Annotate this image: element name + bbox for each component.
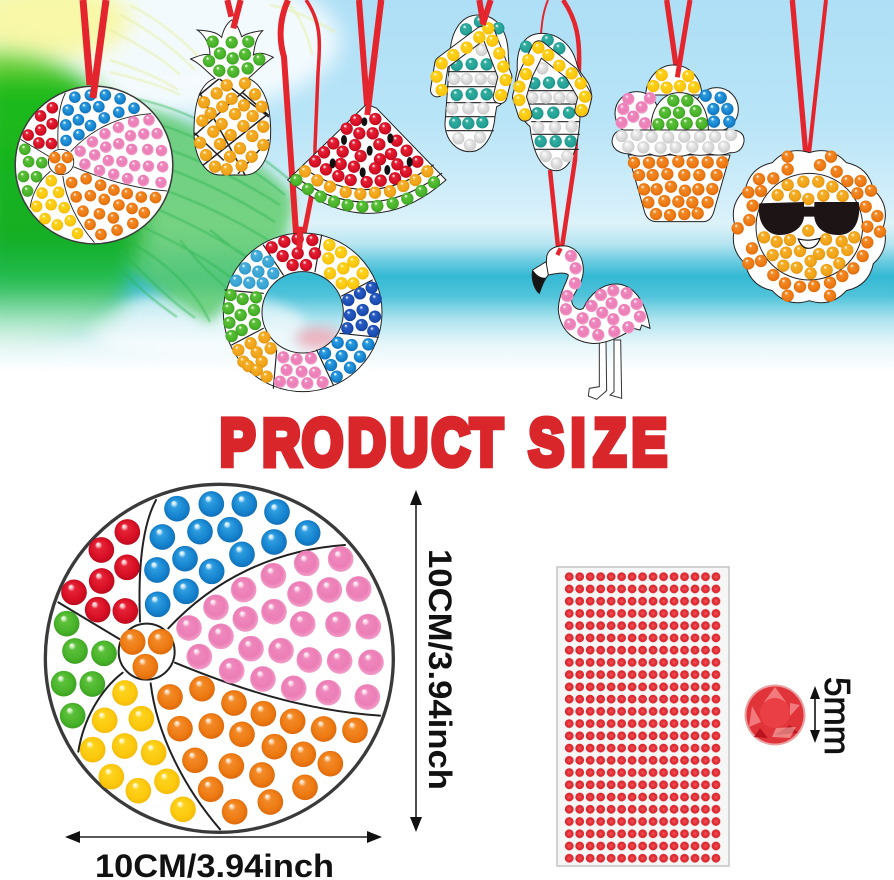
ornament: watermelon slice — [288, 0, 446, 213]
rhinestone sheet — [557, 567, 729, 866]
ribbons behind ornaments — [83, 0, 579, 249]
arrow: height dimension — [410, 490, 422, 832]
arrow: width dimension — [65, 831, 382, 843]
label: gem size: 5mm — [817, 677, 858, 755]
single red rhinestone — [744, 684, 806, 746]
large beach ball diagram — [45, 484, 393, 832]
arrow: gem size — [810, 686, 820, 743]
title: PRODUCT SIZE — [220, 405, 667, 479]
ornament: swim ring — [222, 227, 382, 392]
beach background with palm fronds — [0, 0, 894, 400]
ornament: cupcake — [612, 0, 744, 222]
ornament: flamingo — [532, 246, 650, 399]
ornament: pineapple — [191, 0, 273, 175]
ornament: left flip flop — [431, 0, 512, 152]
ornament: sun with sunglasses — [731, 0, 886, 303]
label: height: 10CM/3.94inch — [422, 549, 458, 790]
ornament: ribbon on beach ball — [93, 0, 106, 98]
ornament: beach ball small — [15, 86, 173, 244]
ornament: right flip flop — [513, 33, 591, 171]
